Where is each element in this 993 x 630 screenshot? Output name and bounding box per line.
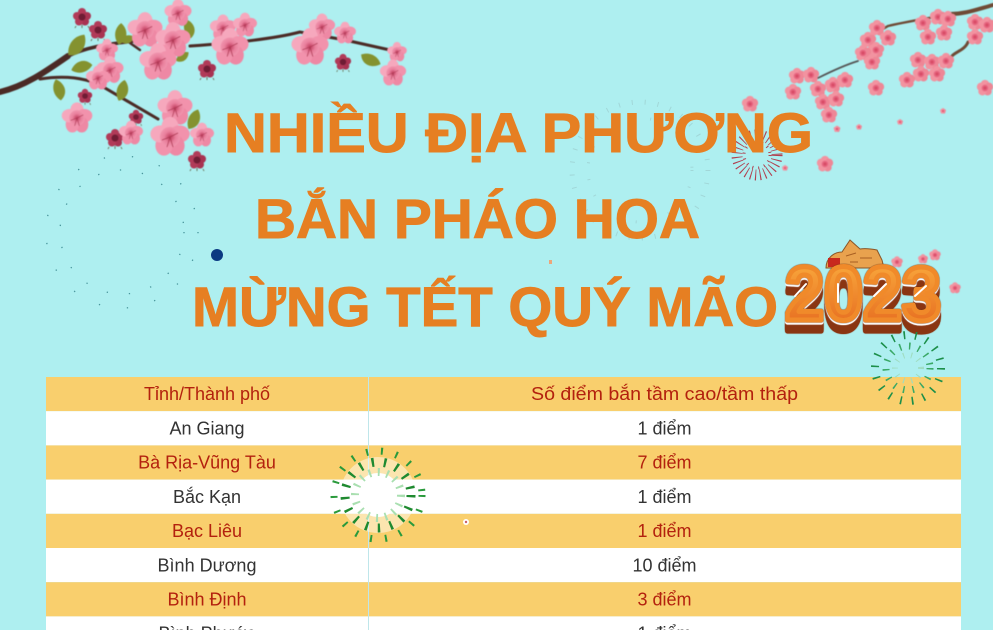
row: An Giang: An Giang [169,418,245,438]
row: Bình Phước [46,616,961,630]
pink blossoms [62,0,407,156]
dark blue dot [211,249,223,261]
icon: cat [826,240,884,268]
row: Bà Rịa-Vũng Tàu: 7 điểm [637,453,692,473]
table header row [46,377,961,411]
title: NHIỀU ĐỊA PHƯƠNG [224,101,813,164]
firework: left teal dotted burst [46,156,198,308]
row: Bình Dương: Bình Dương [158,555,256,575]
table: fireworks by province [46,377,961,630]
row: Bạc Liêu: 1 điểm [637,521,692,541]
row: Bạc Liêu: Bạc Liêu [172,521,242,541]
table header row: Tỉnh/Thành phố [144,384,270,404]
icon: 2023 badge with cat [785,240,961,337]
row: An Giang: 1 điểm [637,418,692,438]
row: Bạc Liêu [46,514,961,548]
small orange spark [549,260,552,264]
petals near badge [891,249,961,293]
row: Bà Rịa-Vũng Tàu [46,445,961,480]
firework: faint grey burst behind title [572,102,708,238]
cherry blossom branch: left [0,0,407,171]
row: Bình Dương: 10 điểm [632,555,697,575]
row: Bình Định [46,582,961,616]
leaves [49,19,381,130]
title: MỪNG TẾT QUÝ MÃO [192,275,778,338]
small dark blossoms [73,8,351,171]
title [192,101,813,338]
row: Bắc Kạn [46,480,961,514]
firework: green burst at table top right [875,335,941,401]
title: BẮN PHÁO HOA [255,187,700,250]
row: Bình Định: Bình Định [167,590,247,610]
branch [818,5,993,78]
numeral highlights [795,284,926,302]
row: Bình Định: 3 điểm [637,590,692,610]
small spark on table [463,519,469,525]
table header row: Số điểm bắn tầm cao/tầm thấp [531,383,798,404]
cherry blossom branch: right [742,5,993,172]
firework: green and white burst over table [334,451,422,539]
firework: red burst behind title [737,135,777,175]
row: An Giang [46,411,961,445]
branch [0,32,390,119]
row: Bắc Kạn: Bắc Kạn [173,486,241,507]
blossoms [742,9,993,172]
2023 numerals: 2023 [785,252,941,337]
row: Bà Rịa-Vũng Tàu: Bà Rịa-Vũng Tàu [138,453,276,473]
row: Bình Dương [46,548,961,582]
row: Bắc Kạn: 1 điểm [637,487,692,507]
